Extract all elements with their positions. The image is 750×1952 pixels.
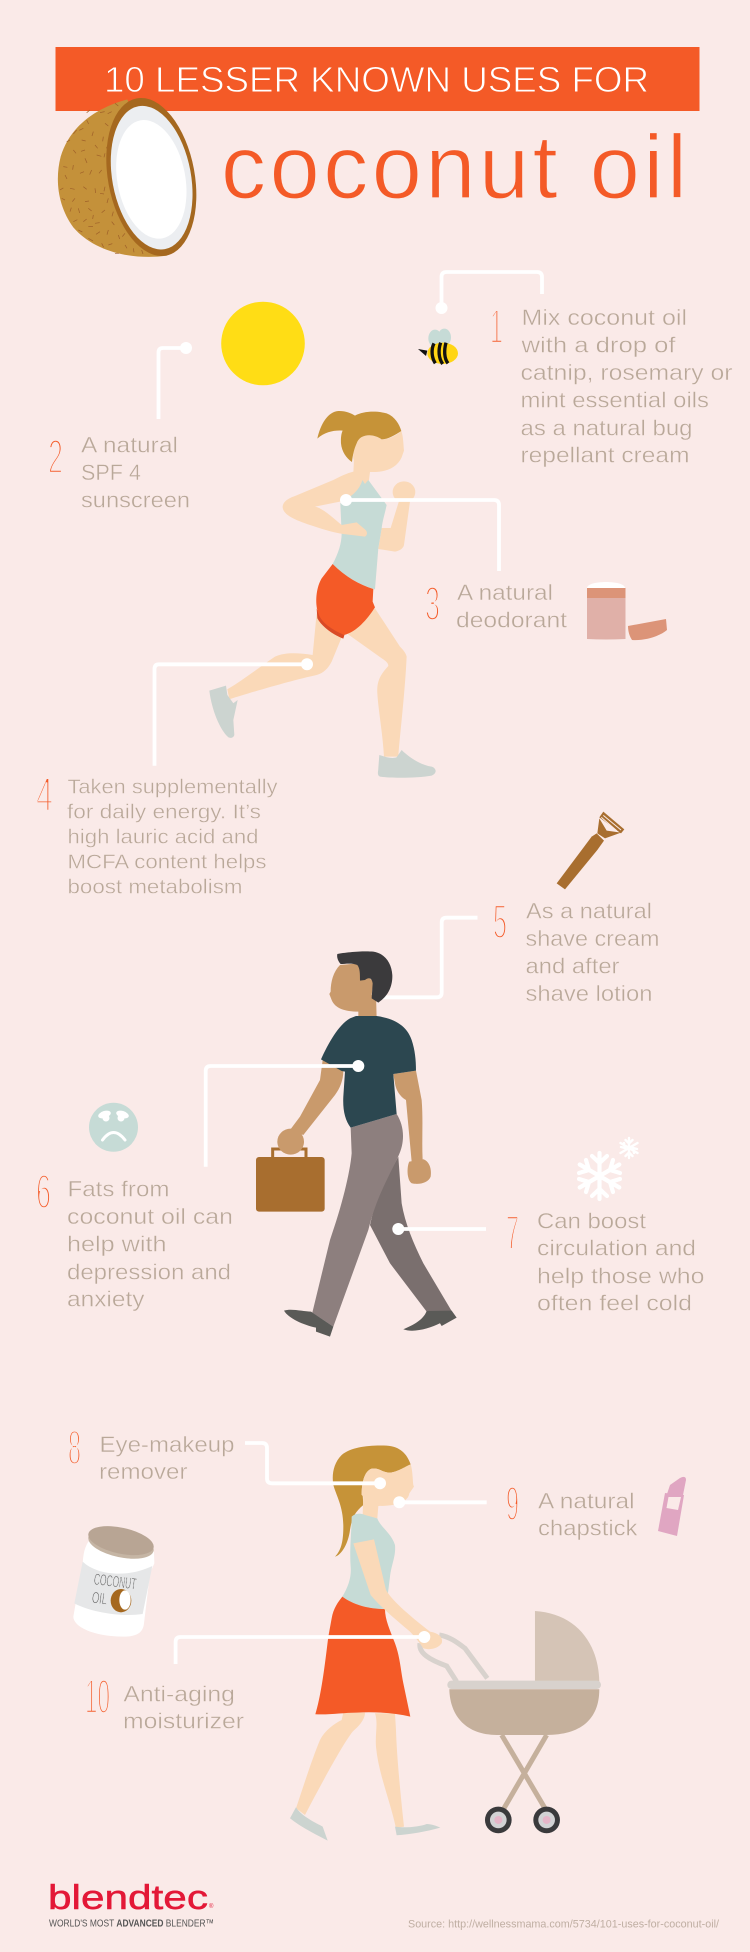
callout 4: high lauric acid and: [68, 825, 258, 848]
callout 7: Can boost: [537, 1208, 647, 1233]
trousers back leg: [370, 1157, 452, 1312]
head: [329, 963, 377, 1018]
t-shirt: [321, 1016, 416, 1128]
callout 7: help those who: [537, 1263, 704, 1288]
skirt: [315, 1597, 410, 1717]
back arm: [378, 482, 415, 552]
connector 1: [436, 272, 542, 314]
pram handle: [420, 1635, 487, 1682]
callout 4: Taken supplementally: [68, 775, 278, 798]
callout 5: and after: [526, 953, 620, 978]
connector 2: [158, 342, 192, 419]
connector 5: [348, 918, 478, 1003]
callout 10: Anti-aging: [123, 1681, 235, 1706]
hair: [317, 411, 401, 462]
callout 10: [85, 1671, 245, 1734]
icon: sun: [221, 302, 305, 385]
icon: deodorant: [587, 582, 667, 640]
connector 6: [206, 1060, 364, 1167]
figure: man with briefcase: [256, 951, 457, 1337]
connector 9: [393, 1496, 487, 1508]
callout 6: [36, 1166, 233, 1312]
callout 9: [506, 1478, 638, 1541]
face: [362, 1464, 414, 1518]
callout 5: shave cream: [526, 926, 660, 951]
trousers front leg: [312, 1114, 403, 1327]
callout 5: shave lotion: [526, 981, 652, 1006]
callout 4: for daily energy. It’s: [67, 800, 261, 823]
front leg: [347, 608, 407, 757]
connector 10: [176, 1631, 430, 1664]
pram hood: [535, 1611, 599, 1682]
briefcase: [256, 1149, 325, 1212]
callout 6: anxiety: [67, 1287, 145, 1312]
top: [342, 1514, 395, 1609]
callout 8: remover: [99, 1459, 188, 1484]
legs: [296, 1713, 404, 1828]
callout 7: circulation and: [537, 1236, 696, 1261]
shorts: [317, 608, 345, 639]
icon: lipstick: [658, 1477, 686, 1536]
icon: coconut oil jar: [73, 1521, 156, 1637]
rear arm: [393, 1071, 423, 1162]
callout 4: 4: [36, 769, 53, 822]
callout 6: coconut oil can: [67, 1204, 233, 1229]
callout 1: as a natural bug: [520, 415, 692, 440]
callout 1: catnip, rosemary or: [520, 360, 733, 385]
callout 3: 3: [425, 578, 440, 631]
callout 10: moisturizer: [123, 1708, 245, 1734]
callout 8: 8: [68, 1422, 81, 1475]
callout 6: help with: [67, 1232, 166, 1257]
callout 3: deodorant: [456, 607, 568, 632]
logo: blendtec: [48, 1879, 214, 1930]
title banner: [56, 47, 700, 111]
tank top: [333, 480, 387, 589]
callout 1: 1: [490, 301, 503, 354]
figure: woman with pram: [290, 1446, 601, 1841]
callout 1: with a drop of: [520, 333, 676, 358]
callout 2: SPF 4: [81, 460, 141, 485]
callout 8: [68, 1422, 234, 1484]
callout 1: mint essential oils: [520, 388, 709, 413]
head: [353, 431, 404, 490]
icon: sad face: [89, 1103, 138, 1152]
raised hand: [393, 481, 415, 503]
callout 9: chapstick: [538, 1516, 638, 1541]
callout 1: repellant cream: [520, 443, 690, 468]
title banner: 10 LESSER KNOWN USES FOR: [104, 59, 649, 100]
callout 10: 10: [85, 1671, 110, 1724]
front arm: [290, 1060, 343, 1135]
rear hand: [408, 1159, 431, 1184]
callout 6: depression and: [67, 1259, 231, 1284]
icon: coconut oil jar: OIL: [91, 1590, 108, 1609]
icon: coconut: [58, 90, 209, 264]
logo: blendtec: WORLD'S MOST ADVANCED BLENDER™: [49, 1918, 214, 1930]
arm: [353, 1539, 442, 1649]
source line: Source: http://wellnessmama.com/5734/101-uses-for-coconut-oil/: [408, 1918, 720, 1930]
icon: coconut oil jar: COCONUT: [93, 1571, 137, 1594]
callout 9: A natural: [538, 1488, 635, 1514]
callout 4: MCFA content helps: [68, 850, 266, 873]
callout 3: A natural: [457, 580, 553, 605]
pram rim: [447, 1681, 601, 1689]
callout 5: 5: [493, 896, 507, 949]
front arm: [283, 472, 367, 537]
figure: runner: [209, 411, 436, 778]
callout 6: Fats from: [68, 1177, 170, 1202]
icon: snowflakes: [579, 1138, 638, 1199]
hair: [333, 1446, 411, 1557]
callout 7: [506, 1207, 704, 1316]
callout 6: 6: [36, 1166, 51, 1219]
callout 2: A natural: [81, 433, 178, 458]
front hand: [277, 1129, 304, 1155]
shoes: [284, 1310, 333, 1337]
back leg: [227, 613, 343, 699]
icon: bee: [418, 329, 458, 364]
connector 8: [245, 1443, 386, 1489]
callout 1: [490, 301, 733, 468]
callout 2: 2: [48, 431, 63, 484]
title: coconut oil: coconut oil: [221, 118, 687, 218]
connector 4: [154, 658, 313, 766]
shoes: [209, 686, 238, 738]
pram basket: [449, 1689, 599, 1735]
callout 4: [36, 769, 278, 898]
callout 3: [425, 578, 568, 632]
flats: [290, 1807, 440, 1841]
callout 5: [493, 896, 660, 1006]
icon: razor: [557, 812, 624, 889]
callout 7: 7: [506, 1207, 519, 1260]
callout 9: 9: [506, 1478, 519, 1531]
callout 8: Eye-makeup: [100, 1432, 234, 1457]
pram frame legs: [502, 1735, 547, 1808]
logo: blendtec: blendtec: [48, 1879, 208, 1917]
callout 5: As a natural: [526, 898, 652, 923]
connector 3: [340, 494, 499, 571]
pram wheels: [485, 1807, 560, 1833]
hair: [337, 951, 392, 1003]
callout 1: Mix coconut oil: [522, 305, 687, 330]
callout 7: often feel cold: [537, 1291, 692, 1316]
callout 4: boost metabolism: [68, 875, 242, 898]
callout 2: sunscreen: [81, 487, 190, 512]
callout 2: [48, 431, 190, 512]
logo: blendtec: ®: [209, 1903, 214, 1910]
connector 7: [392, 1223, 486, 1235]
